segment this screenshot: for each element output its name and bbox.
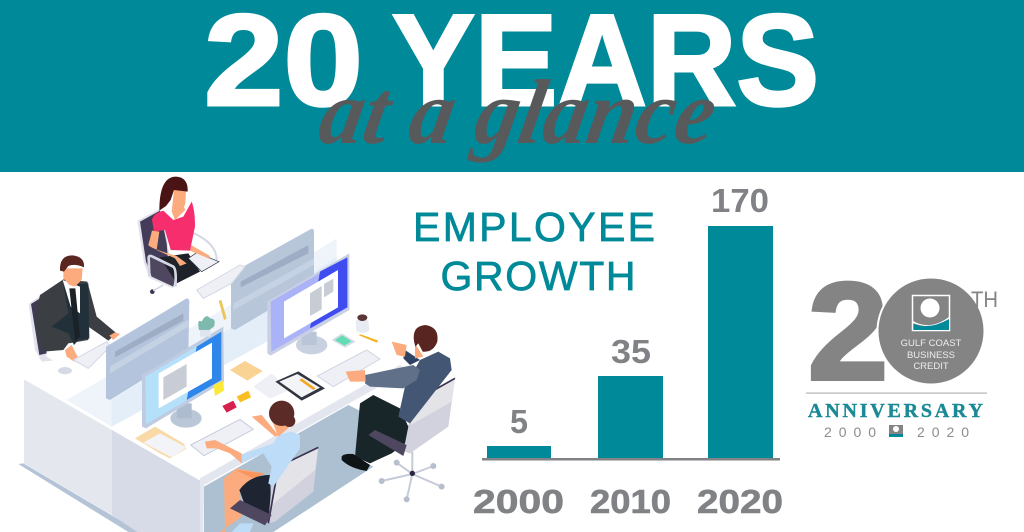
monitor rear right: [231, 229, 314, 330]
illustration: office team at shared desk: [18, 177, 455, 532]
plant: [198, 316, 215, 337]
value labels: 170: [711, 182, 769, 219]
logo: 20th anniversary: [806, 255, 998, 440]
desk: [18, 238, 408, 532]
monitor front left: [142, 327, 224, 428]
bar 2000: [487, 446, 551, 459]
monitor rear left: [106, 298, 189, 400]
year labels: 2020: [697, 483, 783, 520]
subtitle: at a glance: at a glance: [312, 62, 724, 164]
desk items: [135, 300, 378, 458]
value labels: 5: [510, 403, 528, 440]
keyboard right: [317, 350, 380, 387]
keyboard rear right: [197, 265, 245, 298]
TH: TH: [971, 287, 998, 312]
year labels: [473, 483, 783, 520]
dates: [824, 424, 969, 440]
value labels: 35: [611, 333, 651, 370]
chart: employee growth: [413, 182, 783, 520]
company name: GULF COAST: [901, 338, 962, 349]
person: man in grey jacket: [342, 325, 455, 502]
chart title: GROWTH: [440, 253, 636, 299]
person: woman in light blue: [205, 401, 318, 532]
company name: CREDIT: [913, 361, 949, 372]
axis: [482, 458, 780, 460]
chart title: EMPLOYEE: [413, 204, 655, 250]
keyboard front: [191, 419, 253, 456]
company name: [901, 338, 962, 372]
company name: BUSINESS: [907, 350, 955, 361]
header banner: [0, 0, 1024, 172]
dates: 2000: [824, 424, 876, 440]
year labels: 2010: [590, 483, 671, 520]
year labels: 2000: [473, 483, 564, 520]
anniversary: ANNIVERSARY: [808, 400, 984, 422]
dates: 2020: [917, 424, 969, 440]
person: man in dark suit: [29, 255, 120, 374]
person: woman in pink: [137, 177, 219, 294]
big 2: 2: [808, 255, 888, 409]
title: 20 YEARS: [204, 0, 819, 133]
circle zero: [878, 278, 984, 384]
logo mark: [912, 296, 950, 330]
chart title: [413, 204, 655, 299]
bar 2020: [708, 226, 773, 459]
monitor front right: [267, 253, 349, 356]
value labels: [510, 182, 769, 440]
bar 2010: [598, 376, 663, 459]
